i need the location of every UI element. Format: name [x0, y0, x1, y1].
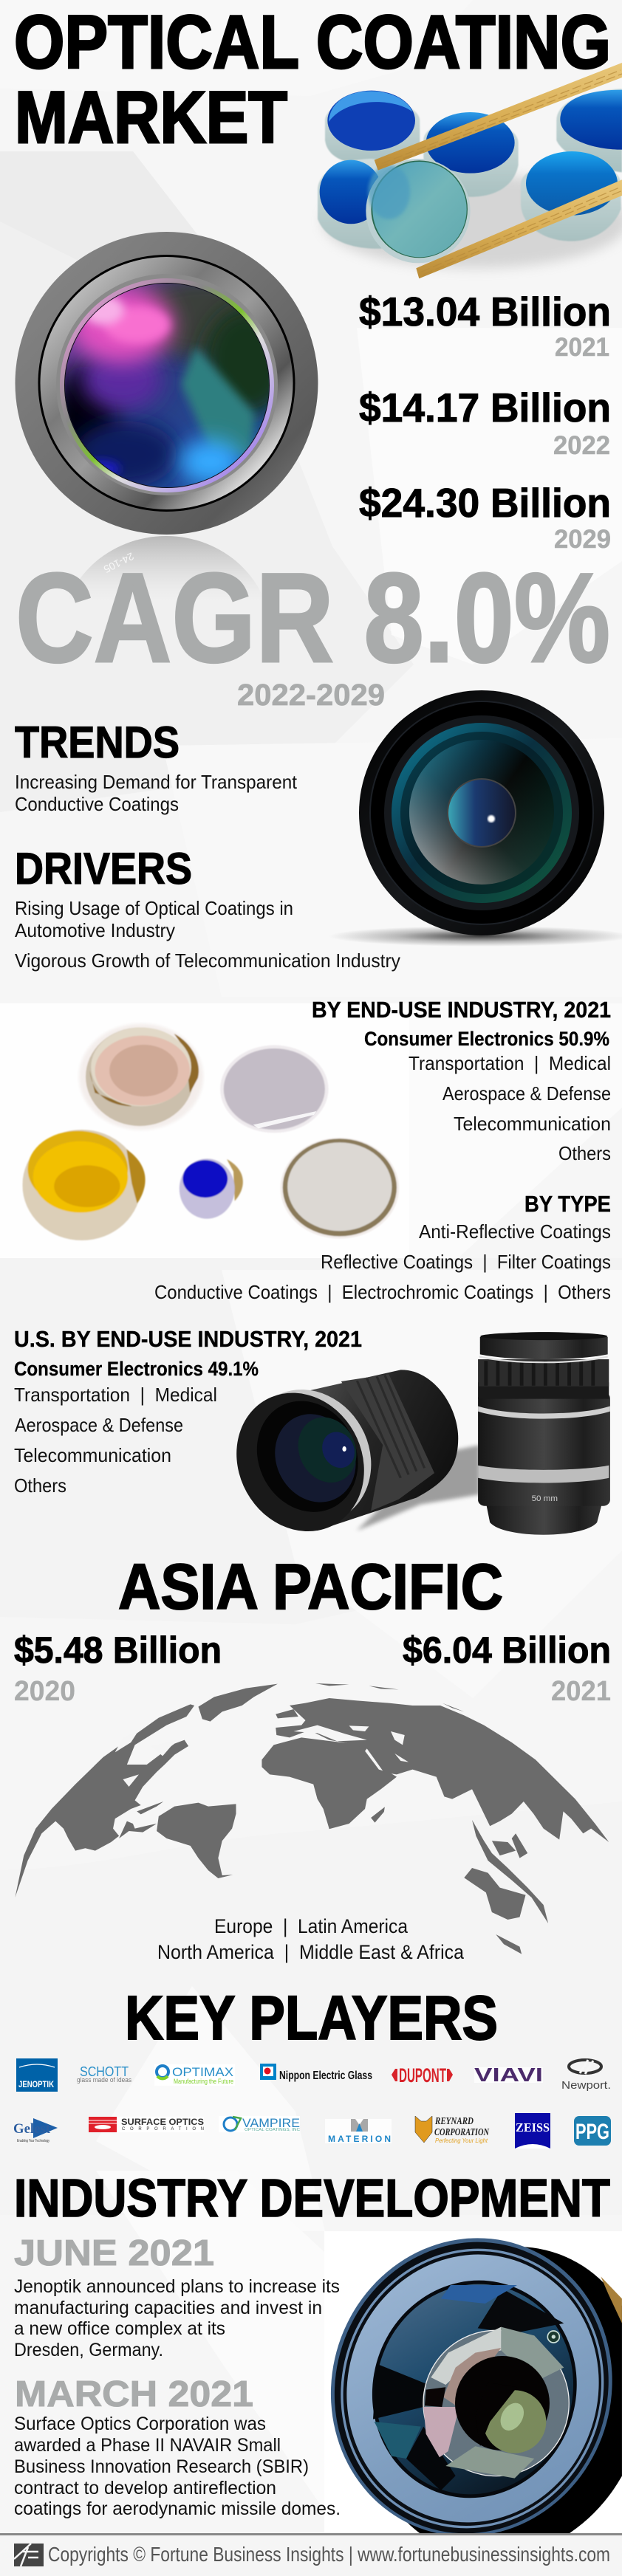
logo: Reynard Corporation: REYNARD	[434, 2116, 474, 2127]
icon: camera lens with colored glass	[15, 232, 318, 583]
CAGR headline: 2022-2029	[237, 678, 385, 712]
image: upright 50 mm lens	[478, 1332, 610, 1535]
development: June 2021: manufacturing capacities and invest in	[14, 2298, 322, 2318]
lens reflection	[61, 536, 271, 734]
logo: Gelest: Enabling Your Technology	[17, 2139, 49, 2143]
logo: Surface Optics: CORPORATION	[122, 2127, 204, 2132]
text block: by type	[154, 1191, 611, 1303]
development: June 2021: a new office complex at its	[14, 2318, 225, 2339]
logo: Nippon Electric Glass: Nippon Electric Glass	[279, 2070, 372, 2082]
development: March 2021: Surface Optics Corporation was	[14, 2414, 266, 2434]
image: coated optical samples	[22, 1024, 399, 1240]
logo: Reynard Corporation: Perfecting Your Light	[435, 2137, 488, 2144]
text: other regions	[157, 1915, 465, 1963]
logo: Vampire: OPTICAL COATINGS, INC	[245, 2128, 300, 2132]
logo: Viavi: VIAVI	[474, 2064, 543, 2086]
image: angled camera lens barrel	[222, 1370, 480, 1542]
Asia Pacific value 2020: $5.48 Billion	[14, 1629, 222, 1671]
footer	[0, 2533, 622, 2566]
value 2029: $24.30 Billion	[359, 480, 611, 526]
value 2022: $14.17 Billion	[359, 385, 611, 430]
text: other regions: North America | Middle East & Africa	[157, 1941, 465, 1963]
logo: Surface Optics	[89, 2117, 204, 2132]
image: close-up camera lens	[324, 2231, 622, 2533]
Asia Pacific value 2021	[403, 1629, 611, 1707]
Asia Pacific value 2021: 2021	[551, 1676, 611, 1707]
logo: Materion	[325, 2119, 392, 2144]
text block: drivers	[15, 844, 400, 972]
heading: key players: KEY PLAYERS	[125, 1983, 498, 2053]
logo: PPG: PPG	[575, 2120, 609, 2144]
icon: black camera lens	[329, 690, 622, 947]
logo: Optimax: Manufacturing the Future	[174, 2078, 233, 2085]
text block: drivers: DRIVERS	[15, 844, 192, 893]
market values	[359, 289, 611, 554]
logos: key players	[13, 2058, 611, 2149]
text block: by type: Anti-Reflective Coatings	[419, 1220, 611, 1243]
logo: Optimax	[154, 2064, 235, 2086]
development: March 2021: Business Innovation Research (SBIR)	[14, 2456, 309, 2477]
text block: U.S. by end-use industry: Transportation | Medical	[14, 1384, 217, 1406]
logo: Reynard Corporation	[415, 2116, 490, 2144]
text block: U.S. by end-use industry: U.S. BY END-USE INDUSTRY, 2021	[14, 1326, 362, 1352]
text block: U.S. by end-use industry: Aerospace & Defense	[15, 1414, 183, 1436]
text block: trends: TRENDS	[15, 718, 180, 767]
development: June 2021	[14, 2233, 340, 2360]
logo: Surface Optics: SURFACE OPTICS	[121, 2117, 204, 2127]
text block: drivers: Automotive Industry	[15, 919, 175, 941]
logo: Optimax: OPTIMAX	[172, 2065, 233, 2079]
Asia Pacific value 2020: 2020	[14, 1676, 75, 1707]
logo: PPG	[574, 2116, 611, 2146]
title: MARKET	[15, 76, 287, 158]
logo: Vampire: VAMPIRE	[242, 2116, 300, 2130]
development: March 2021: MARCH 2021	[15, 2374, 253, 2414]
development: June 2021: Jenoptik announced plans to increase its	[14, 2276, 340, 2297]
logo: Gelest: Gelest	[13, 2121, 51, 2137]
world map	[15, 1683, 609, 1954]
logo: Jenoptik: JENOPTIK	[18, 2079, 54, 2089]
logo: DuPont: DUPONT	[399, 2064, 446, 2086]
title	[14, 0, 611, 158]
image: blue coated lenses held by tweezers	[318, 63, 622, 278]
text block: trends: Conductive Coatings	[15, 793, 179, 815]
panel: segmentation band	[0, 1003, 622, 1258]
lens body	[15, 232, 318, 535]
logo: Materion: MATERION	[328, 2134, 391, 2144]
mirrored lens marking: 24-105	[102, 550, 136, 575]
text block: by type: BY TYPE	[524, 1191, 611, 1217]
development: June 2021: Dresden, Germany.	[14, 2340, 163, 2360]
heading: Asia Pacific: ASIA PACIFIC	[118, 1551, 503, 1623]
text block: U.S. by end-use industry: Consumer Electronics 49.1%	[14, 1358, 259, 1380]
development: March 2021: contract to develop antireflection	[14, 2478, 276, 2498]
text block: by end-use industry: Transportation | Medical	[409, 1052, 611, 1074]
development: March 2021: coatings for aerodynamic missile domes.	[14, 2498, 341, 2519]
logo: Newport	[561, 2060, 611, 2092]
value 2022	[359, 385, 611, 460]
text block: trends	[15, 718, 298, 815]
logo: Schott: glass made of ideas	[77, 2076, 131, 2084]
value 2029	[359, 480, 611, 554]
text block: drivers: Vigorous Growth of Telecommunication Industry	[15, 949, 400, 972]
development: March 2021: awarded a Phase II NAVAIR Small	[14, 2435, 281, 2456]
text: other regions: Europe | Latin America	[214, 1915, 409, 1937]
value 2021: 2021	[555, 333, 609, 362]
text block: by end-use industry: Telecommunication	[454, 1113, 611, 1135]
logo: Zeiss	[515, 2113, 550, 2149]
logo: Vampire	[219, 2116, 300, 2132]
logo: DuPont	[392, 2064, 453, 2086]
text block: U.S. by end-use industry	[14, 1326, 362, 1497]
text block: trends: Increasing Demand for Transparent	[15, 771, 298, 793]
value 2021	[359, 289, 611, 362]
logo: Newport: Newport.	[561, 2079, 611, 2092]
development: June 2021: JUNE 2021	[14, 2233, 214, 2273]
logo: Schott: SCHOTT	[80, 2064, 129, 2079]
value 2029: 2029	[554, 525, 611, 554]
value 2021: $13.04 Billion	[359, 289, 611, 334]
text block: U.S. by end-use industry: Telecommunication	[14, 1444, 171, 1466]
text block: by end-use industry	[312, 997, 611, 1164]
logo: Reynard Corporation: CORPORATION	[434, 2127, 490, 2138]
development: March 2021	[14, 2374, 341, 2519]
icon: Fortune Business Insights logo	[14, 2544, 44, 2566]
logo: Jenoptik	[16, 2058, 58, 2092]
text block: drivers: Rising Usage of Optical Coatings in	[15, 897, 293, 919]
value 2022: 2022	[553, 431, 610, 460]
logo: Nippon Electric Glass	[260, 2064, 372, 2082]
Asia Pacific value 2021: $6.04 Billion	[403, 1629, 611, 1671]
text block: U.S. by end-use industry: Others	[14, 1474, 66, 1497]
Asia Pacific value 2020	[14, 1629, 222, 1707]
logo: Zeiss: ZEISS	[516, 2120, 550, 2134]
logo: Gelest	[13, 2118, 58, 2143]
text block: by end-use industry: Others	[558, 1142, 611, 1164]
image: upright 50 mm lens: 50 mm	[532, 1494, 558, 1503]
